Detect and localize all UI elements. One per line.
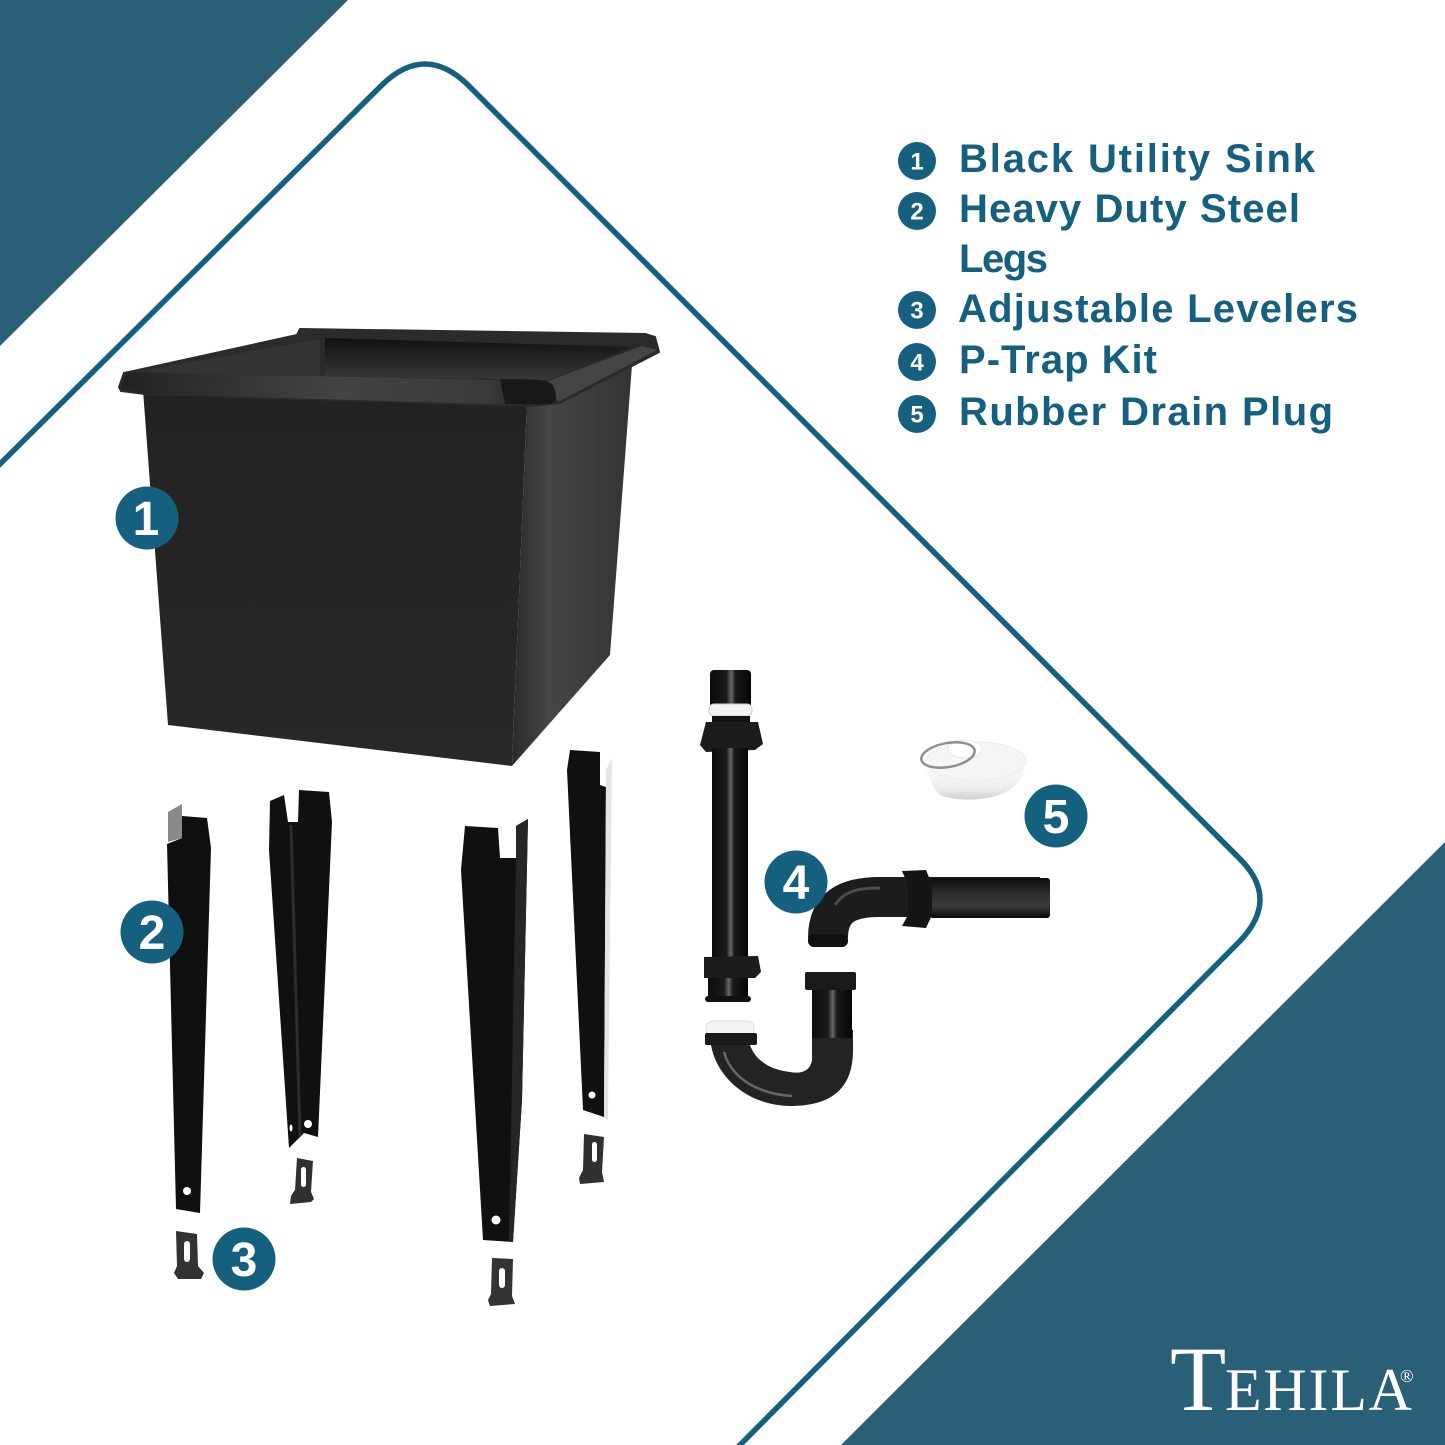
top-left corner triangle — [0, 0, 348, 346]
list item 3: 3 — [910, 298, 924, 324]
callout number 1 — [116, 486, 178, 550]
bottom-right corner triangle — [841, 842, 1445, 1445]
callout number 3: 3 — [231, 1234, 257, 1287]
p-trap J-bend — [705, 972, 856, 1106]
callout number 4 — [764, 850, 828, 914]
elbow pipe with nut — [808, 870, 1050, 947]
list item 5: Rubber Drain Plug — [959, 390, 1333, 434]
black utility sink — [119, 329, 659, 766]
sink interior — [136, 338, 632, 380]
list item 2: Legs — [959, 237, 1048, 281]
callout number 2 — [120, 900, 184, 964]
callout number 5 — [1024, 784, 1088, 848]
callout number 4: 4 — [783, 857, 810, 910]
leveler foot 4 — [579, 1134, 604, 1184]
leg 4 — [567, 750, 612, 1120]
list item 1: 1 — [910, 148, 924, 176]
list item 5: 5 — [910, 402, 924, 428]
list item 3: Adjustable Levelers — [958, 287, 1358, 331]
Tehila logo: ® — [1400, 1366, 1414, 1386]
leg 3 — [461, 819, 528, 1242]
callout number 1: 1 — [133, 493, 159, 546]
list item 1: Black Utility Sink — [959, 137, 1316, 181]
callout number 3 — [212, 1228, 276, 1290]
rubber drain plug — [919, 738, 1026, 800]
leg 2 — [269, 790, 332, 1148]
list item 2 — [898, 187, 1300, 281]
leveler foot 3 — [488, 1258, 515, 1306]
leveler foot 2 — [290, 1158, 314, 1204]
Tehila logo: T — [1170, 1328, 1226, 1430]
callout number 2: 2 — [139, 907, 165, 960]
list item 4: P-Trap Kit — [959, 338, 1157, 382]
Tehila logo: EHILA — [1225, 1357, 1412, 1423]
list item 2: Heavy Duty Steel — [959, 187, 1300, 231]
Tehila logo — [1170, 1328, 1414, 1430]
vertical tailpiece — [700, 670, 763, 1002]
leveler foot 1 — [174, 1231, 204, 1279]
callout number 5: 5 — [1043, 791, 1069, 844]
list item 4: 4 — [910, 350, 924, 376]
parts list — [898, 137, 1358, 434]
leg 1 — [167, 804, 211, 1213]
p-trap kit — [700, 670, 1050, 1106]
list item 2: 2 — [910, 198, 924, 226]
